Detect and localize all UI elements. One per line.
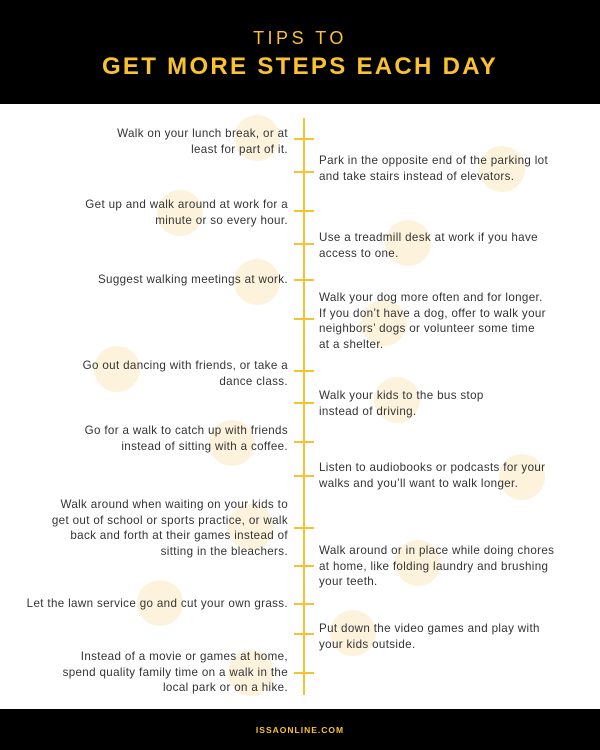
tip: family walk: spend quality family time on a walk in the <box>63 666 288 679</box>
tip: kids bus: instead of driving. <box>319 405 417 418</box>
tip: chores <box>319 544 554 588</box>
tip: video games <box>319 622 540 651</box>
header <box>0 0 600 104</box>
tip: waiting: back and forth at their games instead of <box>70 529 288 542</box>
tip: audiobooks: Listen to audiobooks or podcasts for your <box>319 461 545 474</box>
footer <box>0 709 600 750</box>
tip: park: Park in the opposite end of the parking lot <box>319 154 548 167</box>
tip: get up: Get up and walk around at work for a <box>85 198 288 211</box>
tip: lawn: Let the lawn service go and cut your own grass. <box>27 597 288 610</box>
tip: family walk: Instead of a movie or games at home, <box>81 650 288 663</box>
tip: dog: at a shelter. <box>319 338 384 351</box>
tip: dancing: Go out dancing with friends, or take a <box>83 359 288 372</box>
tip: dog: neighbors’ dogs or volunteer some time <box>319 322 535 335</box>
tip: dog <box>319 291 546 351</box>
tip: family walk: local park or on a hike. <box>163 681 288 694</box>
timeline <box>303 118 305 695</box>
tip: family walk <box>63 650 288 694</box>
tip: audiobooks <box>319 461 545 490</box>
tip: kids bus: Walk your kids to the bus stop <box>319 389 484 402</box>
tip: chores: your teeth. <box>319 575 378 588</box>
tip: chores: Walk around or in place while doing chores <box>319 544 554 557</box>
title: tips to: TIPS TO <box>253 28 347 48</box>
tip: video games: Put down the video games and play with <box>319 622 540 635</box>
tip: meetings: Suggest walking meetings at work. <box>98 273 288 286</box>
tip: treadmill <box>319 231 538 260</box>
tip: dog: If you don’t have a dog, offer to walk your <box>319 307 546 320</box>
tip: park: and take stairs instead of elevators. <box>319 170 514 183</box>
tip: chores: at home, like folding laundry and brushing <box>319 560 548 573</box>
tip: lunch: least for part of it. <box>191 143 288 156</box>
tip: treadmill: access to one. <box>319 247 399 260</box>
tip: friends walk: instead of sitting with a coffee. <box>121 440 288 453</box>
footer url: ISSAONLINE.COM <box>256 725 344 735</box>
tip: waiting: get out of school or sports practice, or walk <box>52 514 288 527</box>
tip: waiting: sitting in the bleachers. <box>161 545 288 558</box>
tip: kids bus <box>319 389 484 418</box>
tip: audiobooks: walks and you’ll want to walk longer. <box>319 477 518 490</box>
tip: park <box>319 154 548 183</box>
tip: dog: Walk your dog more often and for longer. <box>319 291 543 304</box>
tip: friends walk <box>85 424 288 453</box>
tip: get up <box>85 198 288 227</box>
tip: treadmill: Use a treadmill desk at work if you have <box>319 231 538 244</box>
tip: waiting <box>52 498 288 558</box>
tip: get up: minute or so every hour. <box>155 214 288 227</box>
tip: lunch <box>117 127 288 156</box>
tip: dancing: dance class. <box>219 375 288 388</box>
tip: video games: your kids outside. <box>319 638 416 651</box>
tip: dancing <box>83 359 288 388</box>
tip: friends walk: Go for a walk to catch up with friends <box>85 424 288 437</box>
tip: lunch: Walk on your lunch break, or at <box>117 127 288 140</box>
title: main: GET MORE STEPS EACH DAY <box>102 53 498 80</box>
tip: waiting: Walk around when waiting on your kids to <box>60 498 288 511</box>
